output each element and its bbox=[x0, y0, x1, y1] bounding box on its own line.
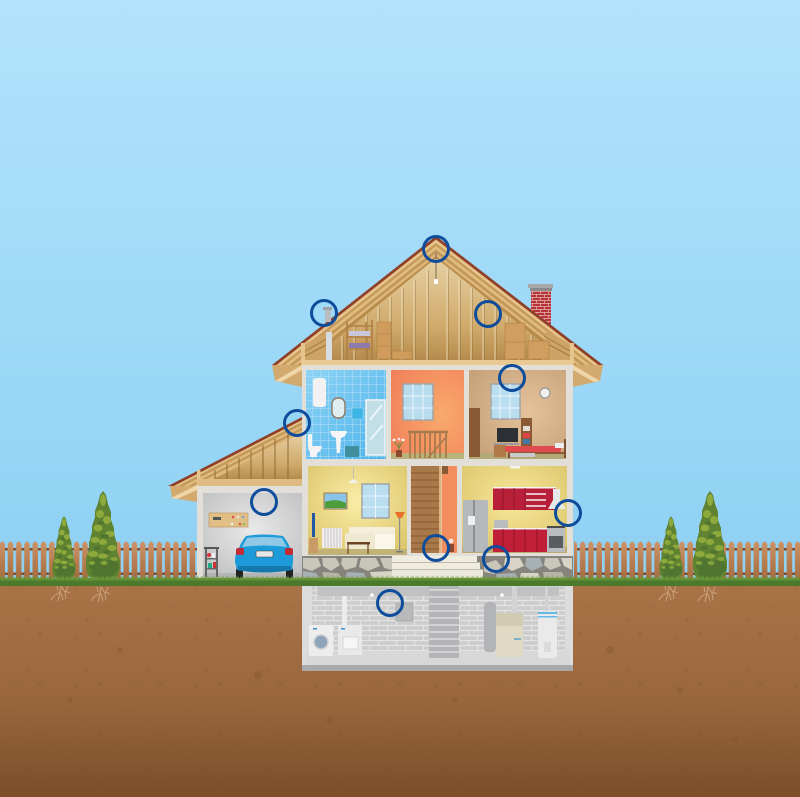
towel bbox=[352, 408, 363, 419]
living room bbox=[308, 466, 407, 555]
picture bbox=[324, 493, 347, 509]
marker: roof vent bbox=[312, 300, 336, 326]
basement bbox=[302, 585, 573, 671]
furnace bbox=[496, 613, 523, 657]
marker: basement wall bbox=[378, 590, 402, 616]
stair hall room bbox=[391, 370, 464, 459]
shower bbox=[366, 400, 385, 455]
marker: attic wall bbox=[476, 302, 500, 326]
marker: garage wall bbox=[252, 490, 276, 514]
stone foundation bbox=[302, 556, 573, 579]
marker: roof peak bbox=[424, 236, 448, 262]
water heater bbox=[313, 378, 326, 407]
right soffit bbox=[573, 365, 603, 387]
ceiling fan bbox=[507, 372, 522, 388]
door bbox=[469, 408, 480, 457]
basement lights bbox=[370, 593, 504, 597]
garage wall bbox=[197, 486, 302, 578]
kitchen bbox=[462, 466, 567, 553]
attic interior boards bbox=[332, 258, 540, 351]
bookcase bbox=[521, 418, 532, 446]
potted flower bbox=[393, 438, 404, 457]
garage soffit bbox=[170, 486, 197, 502]
marker: bedroom ceiling bbox=[500, 366, 524, 390]
marker circles bbox=[252, 236, 580, 616]
radiator bbox=[322, 528, 342, 548]
dryer bbox=[338, 625, 362, 655]
garage roof bbox=[168, 417, 302, 486]
garage shelf bbox=[209, 513, 248, 527]
car bbox=[235, 534, 293, 578]
ceiling lamp bbox=[349, 467, 358, 483]
trees left bbox=[51, 491, 120, 602]
garage interior bbox=[203, 493, 302, 575]
water heater bbox=[538, 611, 557, 658]
marker: kitchen exterior wall bbox=[556, 500, 580, 526]
railing bbox=[408, 432, 448, 458]
attic vent pipe bbox=[323, 307, 332, 360]
upper cabinets bbox=[493, 487, 556, 510]
chimney bbox=[528, 284, 553, 324]
clock bbox=[540, 388, 550, 398]
attic knee walls bbox=[301, 330, 574, 361]
main house roof and attic bbox=[272, 236, 603, 387]
window bbox=[362, 484, 389, 518]
picket fence right bbox=[574, 541, 800, 579]
ceiling light bbox=[510, 466, 520, 468]
attic floor bbox=[301, 360, 574, 365]
attic light bulb bbox=[434, 253, 438, 284]
basement floor bbox=[306, 651, 570, 665]
side brick walls bbox=[303, 586, 312, 665]
grass strip bbox=[0, 575, 800, 586]
sink bbox=[330, 431, 347, 453]
ducts bbox=[318, 587, 559, 652]
marker: kitchen floor bbox=[484, 546, 508, 572]
electric panel bbox=[396, 603, 413, 621]
orange hall strip bbox=[442, 466, 457, 553]
tv and stand bbox=[309, 513, 318, 553]
staircase bbox=[411, 466, 442, 553]
picket fence left bbox=[0, 541, 197, 579]
marker: garage roof junction bbox=[284, 410, 310, 436]
left soffit bbox=[272, 365, 302, 387]
range hood bbox=[548, 489, 566, 509]
sofa bbox=[345, 527, 395, 549]
sky background bbox=[0, 0, 800, 585]
tool cart bbox=[204, 547, 219, 577]
washer bbox=[309, 625, 333, 656]
window bbox=[491, 384, 520, 419]
trees right bbox=[659, 491, 727, 602]
soil ground bbox=[0, 584, 800, 797]
attic boxes bbox=[377, 322, 549, 359]
coffee table bbox=[347, 542, 370, 554]
floor lamp bbox=[395, 512, 405, 552]
garage bbox=[168, 417, 302, 578]
rafters bbox=[272, 238, 603, 365]
basement stairs bbox=[429, 586, 459, 658]
brick back wall bbox=[312, 586, 565, 651]
bed bbox=[505, 439, 566, 458]
refrigerator bbox=[463, 500, 488, 552]
basket bbox=[345, 446, 359, 457]
microwave bbox=[494, 520, 508, 528]
house walls bbox=[302, 365, 573, 557]
toilet bbox=[308, 434, 322, 457]
lower cabinets bbox=[493, 528, 547, 552]
entry steps bbox=[392, 556, 483, 578]
mirror bbox=[332, 398, 345, 418]
marker: stair base bbox=[424, 536, 448, 560]
bedroom bbox=[469, 370, 566, 459]
attic shelf bbox=[347, 320, 372, 360]
stove bbox=[547, 526, 565, 552]
bathroom bbox=[306, 370, 386, 459]
window bbox=[403, 384, 433, 420]
tv bbox=[494, 428, 519, 457]
